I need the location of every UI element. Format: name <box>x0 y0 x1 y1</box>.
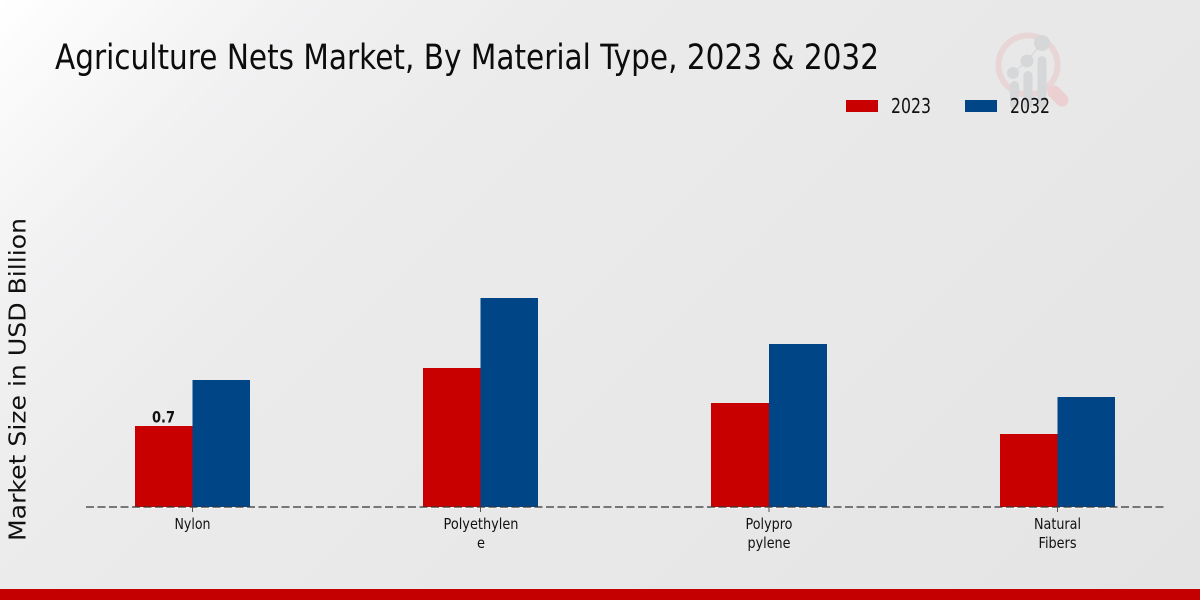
icon: watermark logo <box>998 35 1062 109</box>
category label: Polypropylene: pylene <box>748 534 790 552</box>
x-axis baseline <box>86 506 1164 508</box>
y-axis label: Market Size in USD Billion <box>4 218 32 541</box>
legend item: 2032 <box>965 94 1050 118</box>
category label: Polypropylene: Polypro <box>746 515 792 533</box>
value label: 0.7: 0.7 <box>152 408 175 426</box>
category label: Polypropylene <box>746 515 792 552</box>
bars: Nylon <box>135 380 250 507</box>
bar chart <box>86 298 1164 552</box>
category label: Natural Fibers <box>1034 515 1081 552</box>
category label: Polyethylene: e <box>477 534 485 552</box>
category label: Polyethylene: Polyethylen <box>444 515 518 533</box>
category label: Nylon: Nylon <box>174 515 210 533</box>
bars: Polyethylene <box>423 298 538 507</box>
bars: Polypropylene <box>711 344 827 507</box>
legend item: 2023: 2023 <box>891 94 931 118</box>
category label: Natural Fibers: Natural <box>1034 515 1081 533</box>
legend item: 2032: 2032 <box>1010 94 1050 118</box>
category label: Natural Fibers: Fibers <box>1038 534 1076 552</box>
category label: Polyethylene <box>444 515 518 552</box>
title: Agriculture Nets Market, By Material Type, 2023 & 2032 <box>55 38 879 78</box>
footer band <box>0 589 1200 600</box>
legend <box>846 94 1050 118</box>
legend item: 2023 <box>846 94 931 118</box>
bars: Natural Fibers <box>1000 397 1115 507</box>
